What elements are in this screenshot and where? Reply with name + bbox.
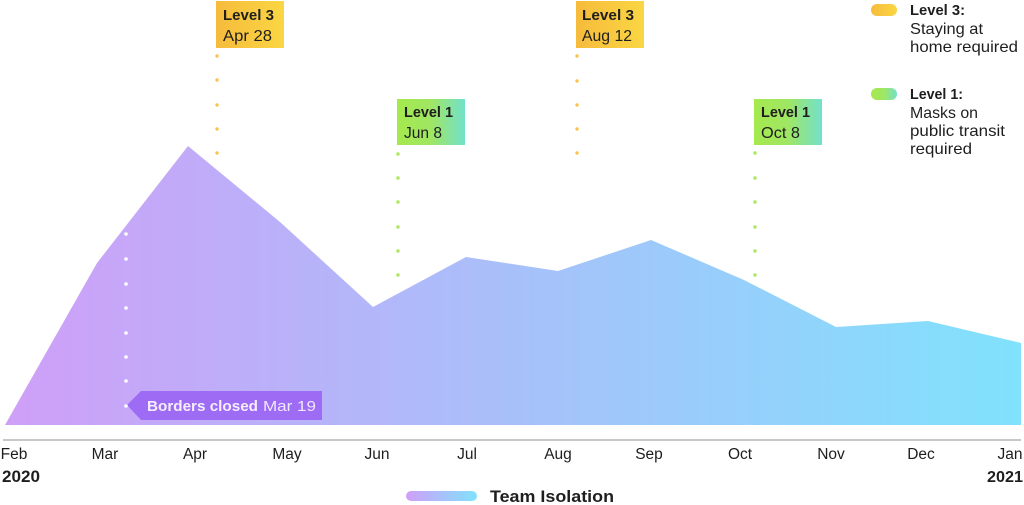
callout: level 1 Oct 8: Oct 8 xyxy=(761,125,800,142)
dotted marker: level 1 Jun 8 xyxy=(396,152,400,277)
legend: level 1: required xyxy=(910,141,972,158)
x axis: Mar xyxy=(92,446,118,463)
legend: team isolation xyxy=(406,487,614,505)
legend: level 3 xyxy=(871,2,1018,56)
legend: level 1 xyxy=(871,86,1006,158)
x axis: May xyxy=(272,446,302,463)
x axis: Jun xyxy=(364,446,390,463)
callout: level 3 Apr 28 xyxy=(216,1,284,48)
callout: borders closed xyxy=(124,391,322,420)
x axis: Sep xyxy=(635,446,663,463)
x axis: Feb xyxy=(1,446,27,463)
legend: level 3: home required xyxy=(910,39,1018,56)
callout: level 1 Jun 8: Jun 8 xyxy=(404,125,442,142)
callout: level 3 Apr 28: Apr 28 xyxy=(223,28,272,45)
callout: level 1 Jun 8: Level 1 xyxy=(404,104,453,121)
x axis: Jan xyxy=(998,446,1022,463)
dotted marker: borders closed xyxy=(124,232,128,383)
x axis: Dec xyxy=(907,446,935,463)
area chart: team isolation xyxy=(5,146,1021,425)
callout: level 1 Oct 8: Level 1 xyxy=(761,104,810,121)
legend: level 3: Staying at xyxy=(910,21,984,38)
legend: level 1: Level 1: xyxy=(910,86,963,103)
legend: level 1: Masks on xyxy=(910,105,978,122)
dotted marker: level 3 Apr 28 xyxy=(215,54,219,155)
legend: level 3: Level 3: xyxy=(910,2,965,19)
x axis: 2020 xyxy=(2,468,40,486)
callout: level 3 Apr 28: Level 3 xyxy=(223,7,274,24)
x axis: 2021 xyxy=(987,469,1023,486)
callout: borders closed: Borders closed xyxy=(147,398,258,415)
dotted marker: level 3 Aug 12 xyxy=(575,54,579,155)
x axis xyxy=(1,440,1023,486)
x axis: Jul xyxy=(457,446,477,463)
callout: borders closed: Mar 19 xyxy=(263,398,316,415)
callout: level 3 Aug 12: Aug 12 xyxy=(582,28,632,45)
legend: level 1: public transit xyxy=(910,123,1006,140)
x axis: Aug xyxy=(544,446,572,463)
callout: level 1 Oct 8 xyxy=(754,99,822,145)
callout: level 3 Aug 12: Level 3 xyxy=(582,7,634,24)
x axis: Apr xyxy=(183,446,207,463)
callout: level 1 Jun 8 xyxy=(397,99,465,145)
x axis: Oct xyxy=(728,446,753,463)
x axis: Nov xyxy=(817,446,845,463)
callout: level 3 Aug 12 xyxy=(576,1,644,48)
dotted marker: level 1 Oct 8 xyxy=(753,151,757,277)
